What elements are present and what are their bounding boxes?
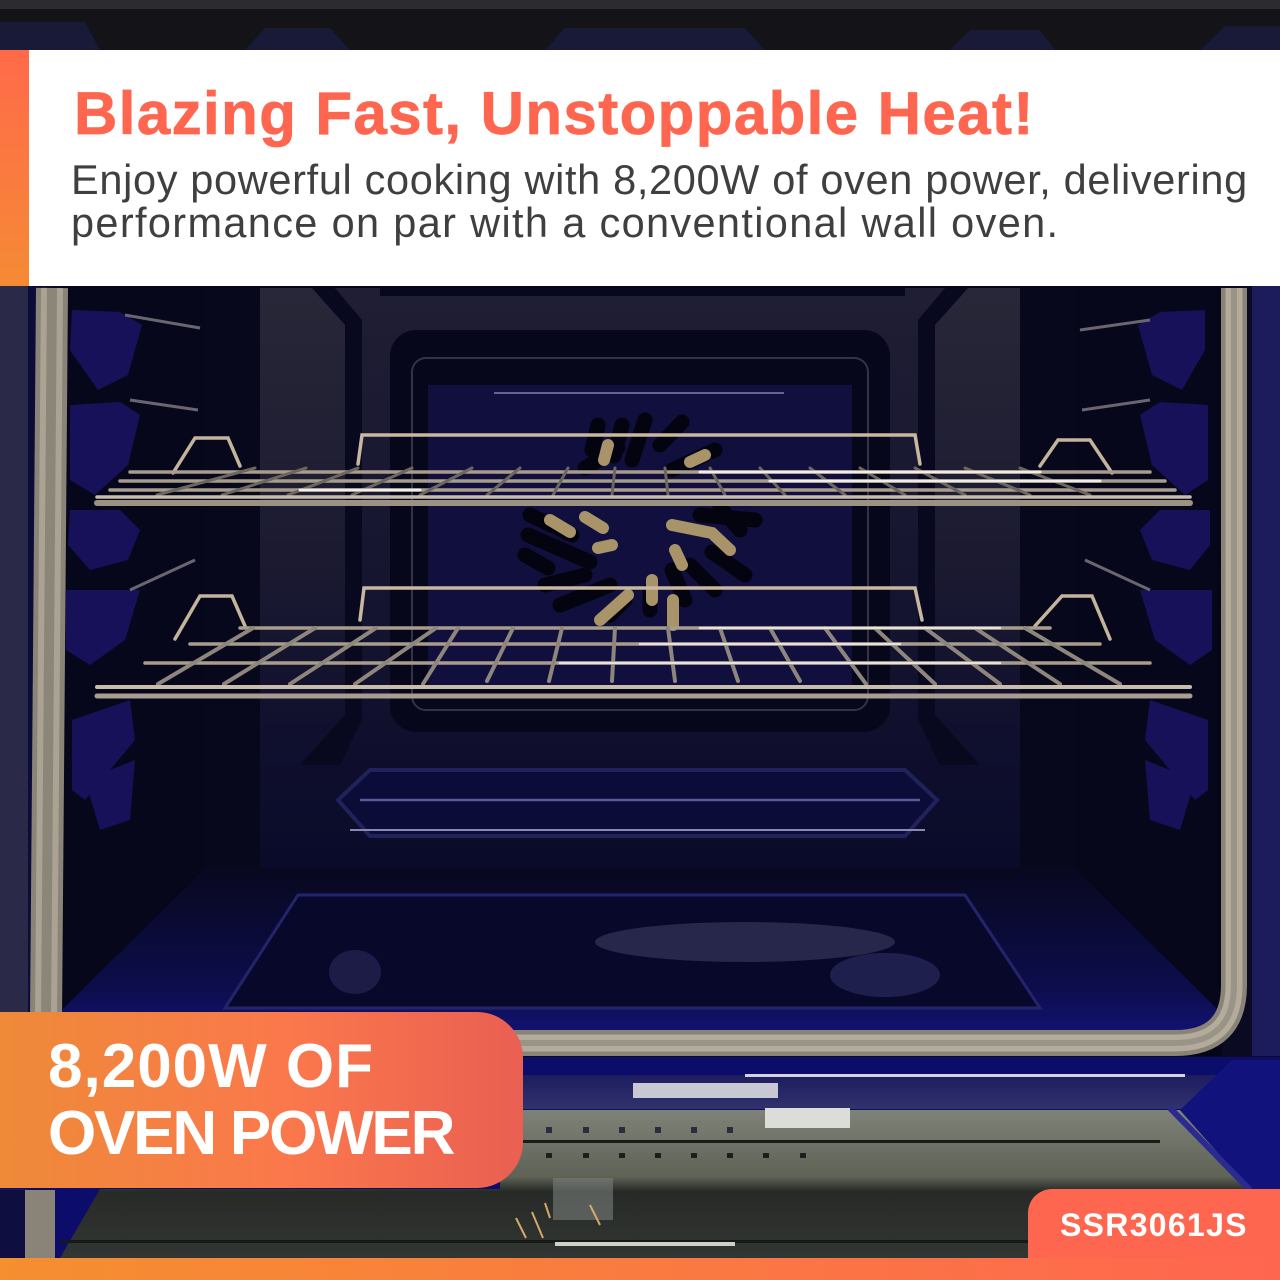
orange accent bar bbox=[0, 50, 29, 286]
rack guide blue shapes bbox=[66, 310, 1212, 830]
header panel bbox=[0, 50, 1280, 286]
model number tag: SSR3061JS bbox=[1060, 1207, 1248, 1243]
footer gradient bar bbox=[0, 1258, 1280, 1280]
subtitle text: Enjoy powerful cooking with 8,200W of oven power, delivering bbox=[71, 156, 1248, 203]
subtitle text bbox=[71, 156, 1248, 246]
side walls bbox=[64, 288, 205, 1010]
model number tag bbox=[1028, 1189, 1280, 1258]
back wall bbox=[205, 288, 1075, 870]
callout: oven power badge: OVEN POWER bbox=[48, 1099, 453, 1168]
subtitle text: performance on par with a conventional wall oven. bbox=[71, 199, 1059, 246]
door frame and glass bbox=[0, 1057, 1280, 1258]
bottom rack bbox=[97, 588, 1190, 696]
side panels bbox=[260, 288, 362, 765]
cavity bbox=[62, 286, 1222, 1056]
callout: oven power badge: 8,200W OF bbox=[48, 1032, 374, 1101]
top strip bbox=[0, 0, 1280, 50]
floor bbox=[62, 868, 1218, 1040]
fan slots bbox=[525, 420, 755, 625]
top rack bbox=[97, 435, 1190, 503]
title: Blazing Fast, Unstoppable Heat! bbox=[74, 80, 1035, 147]
callout: oven power badge bbox=[0, 1012, 523, 1188]
recessed fan panel bbox=[390, 330, 890, 732]
gasket bbox=[46, 288, 1234, 1043]
side frame bbox=[0, 286, 30, 1056]
lower back emboss bbox=[338, 770, 937, 836]
